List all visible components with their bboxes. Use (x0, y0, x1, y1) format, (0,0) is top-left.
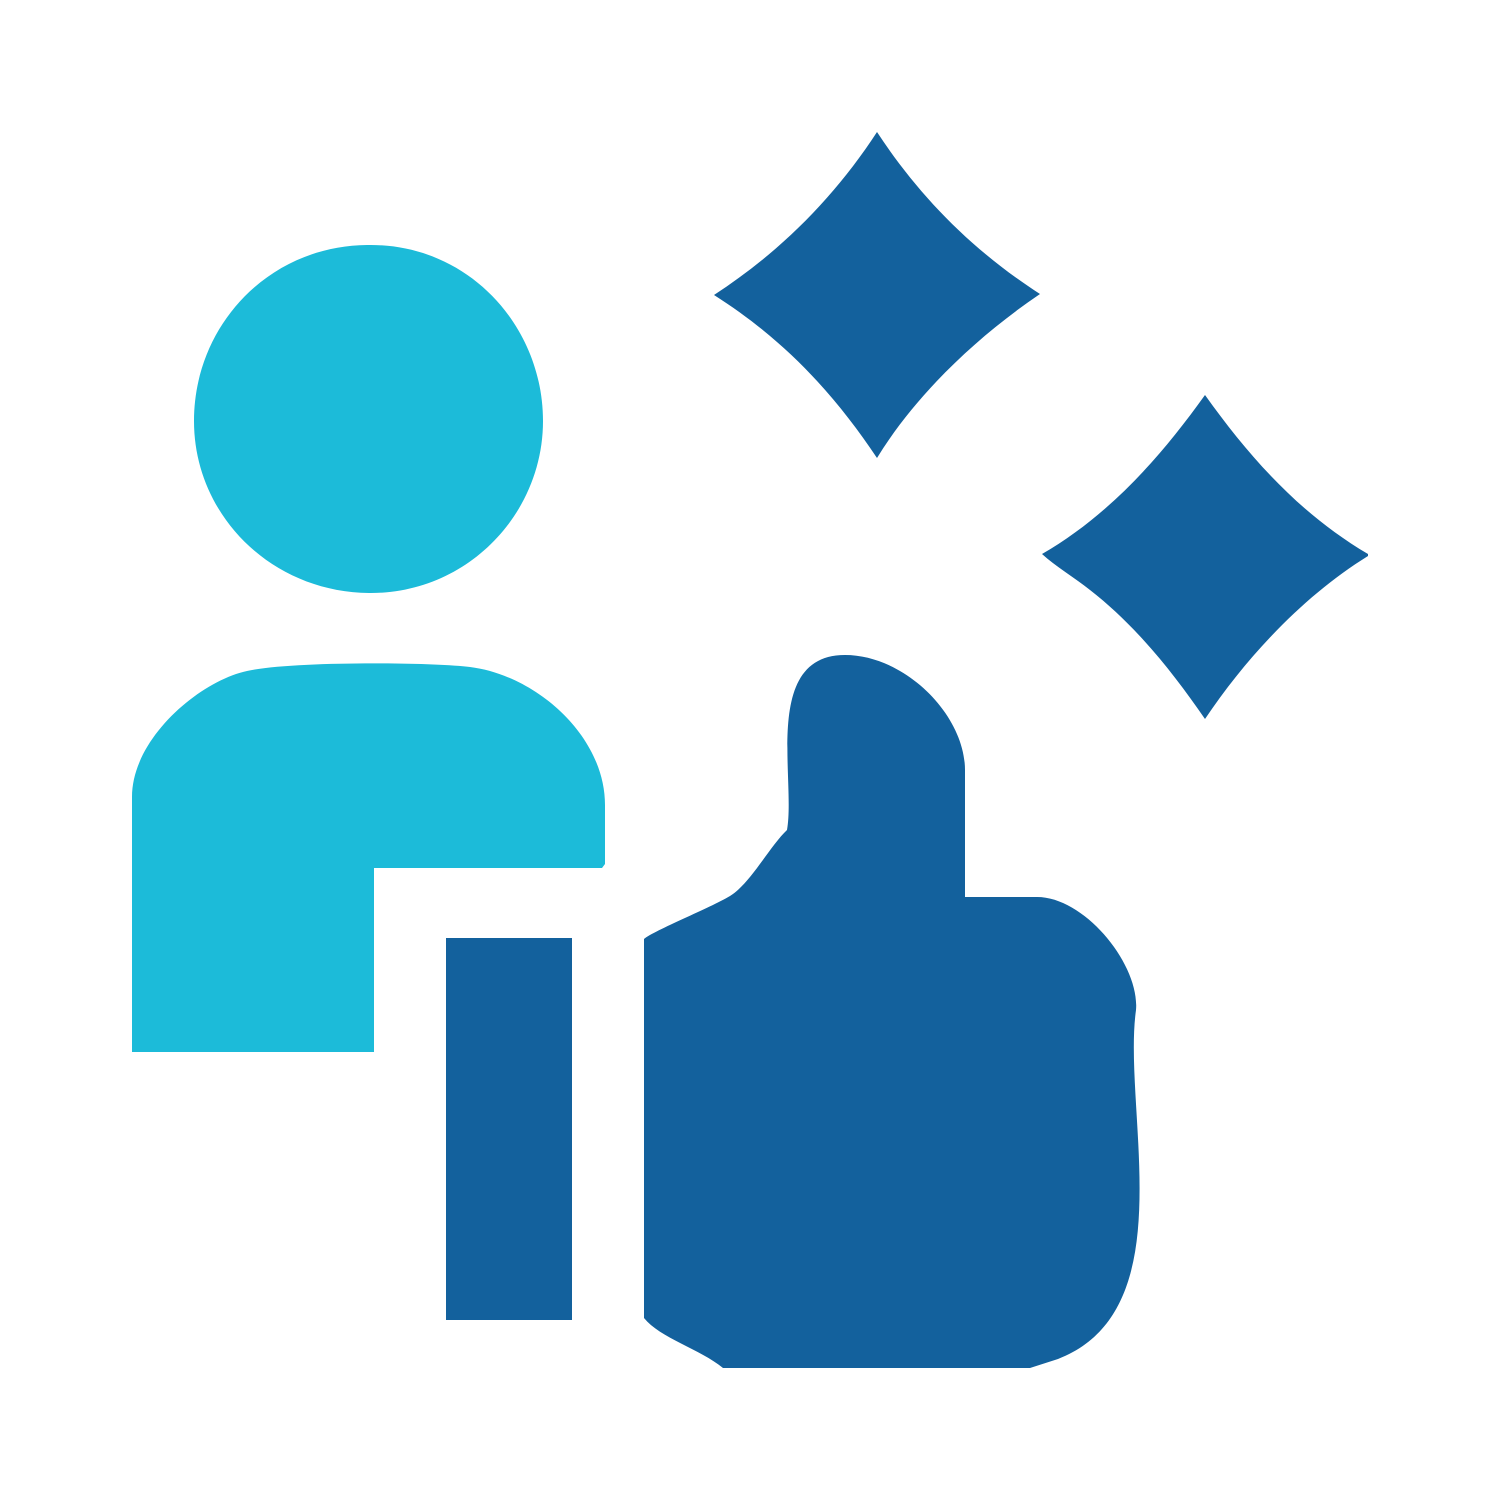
icon: thumbs up cuff (446, 938, 572, 1320)
icon: small sparkle (1042, 395, 1368, 719)
icon: person body (132, 663, 605, 1052)
icon: person head (194, 245, 543, 593)
icon: large sparkle (714, 132, 1040, 458)
icon: thumbs up hand (644, 655, 1140, 1368)
